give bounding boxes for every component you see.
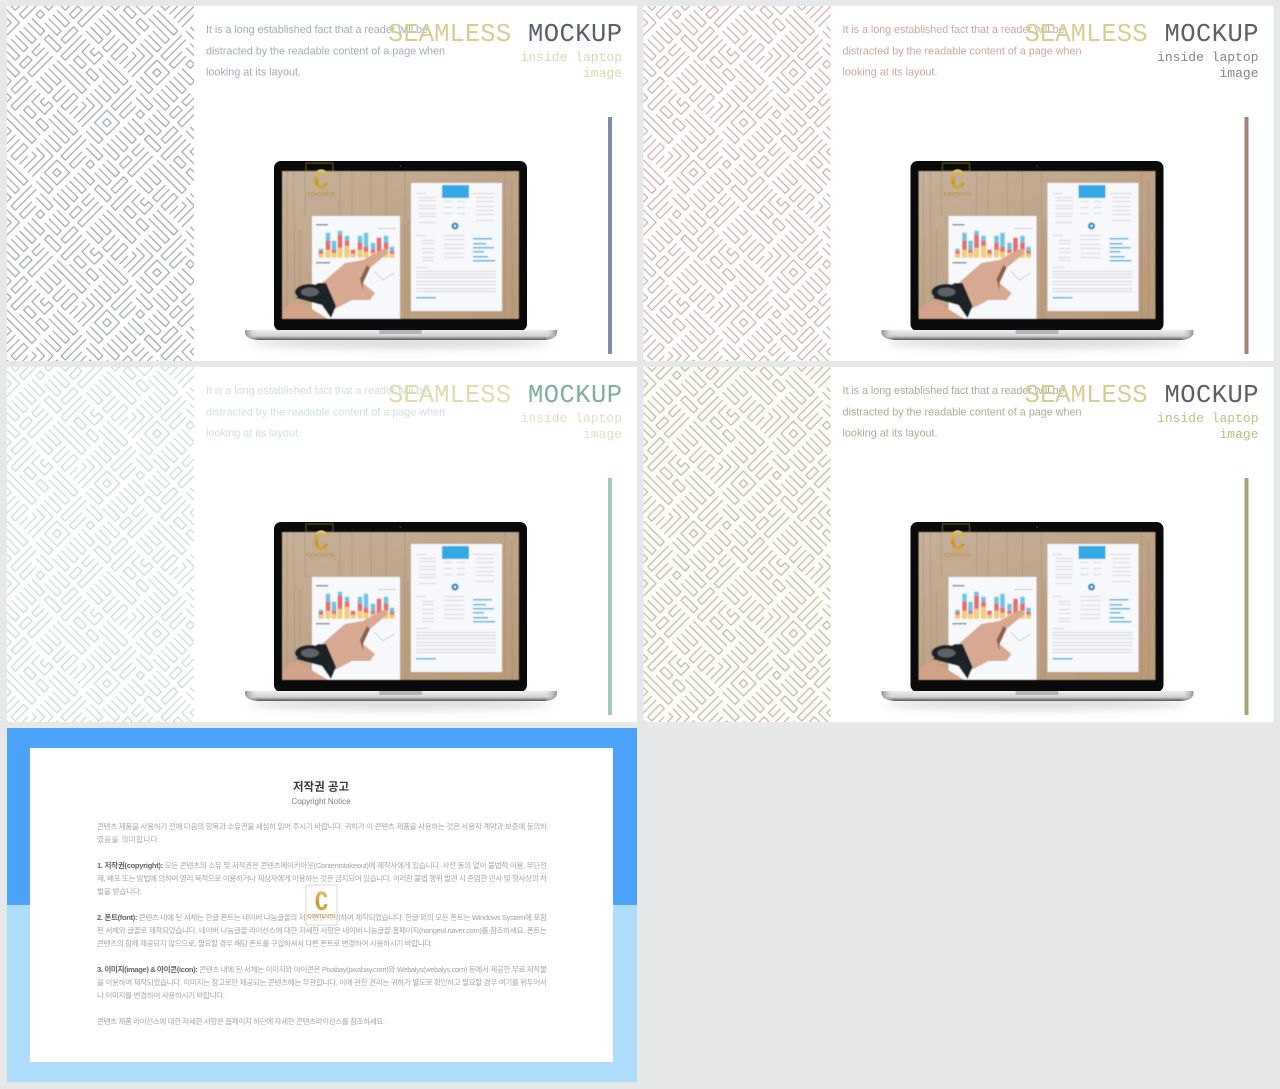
heading: [1024, 20, 1258, 49]
maze pattern panel: [644, 367, 830, 722]
icon: gold logo stamp: C: [315, 887, 328, 919]
subtitle: [1157, 50, 1258, 81]
heading: MOCKUP: [1164, 20, 1258, 49]
text block: image and icon: [97, 964, 547, 1000]
icon: gold logo: [944, 526, 972, 560]
text block: image and icon: 3. 이미지(image) & 아이콘(icon): 콘텐츠 내에 된 서체는 이미지와 아이콘은 Pixabay(pixabay.com)와 Webalys(webalys.com) 등에서 제공한 무료 저작물: [97, 964, 547, 974]
heading: SEAMLESS: [1024, 20, 1148, 49]
subheading: Copyright Notice: [291, 797, 351, 806]
text block: font: 2. 폰트(font): 콘텐츠 내에 된 서체는 한글 폰트는 네이버 나눔글꼴의 저작물을 제외하여 제작되었습니다. 한글 외의 모든 폰트는 Windows System에 포함: [97, 912, 547, 922]
text block: copyright: [97, 860, 547, 896]
maze pattern panel: [7, 6, 194, 361]
subtitle: image: [583, 427, 622, 442]
panel: copyright notice: [7, 728, 637, 1082]
heading: MOCKUP: [528, 20, 622, 49]
accent bar: [1244, 117, 1248, 354]
subtitle: [521, 50, 622, 81]
subtitle: image: [1219, 66, 1258, 81]
accent bar: [608, 478, 612, 715]
icon: gold logo: [307, 165, 335, 199]
text block: [842, 24, 1082, 78]
text block: distracted by the readable content of a page when: [842, 406, 1082, 418]
text block: image and icon: 을 이용하여 제작되었습니다. 이미지는 참고로만 제공되는 콘텐츠에는 무관합니다. 이에 관한 권리는 귀하가 별도로 확인하고 필요할 경우 여기를 위두어서: [97, 977, 547, 987]
subtitle: inside laptop: [521, 411, 622, 426]
text block: It is a long established fact that a reader will be: [206, 24, 428, 36]
heading: copyright title: 저작권 공고: [293, 780, 349, 794]
maze pattern panel: [644, 6, 830, 361]
heading: SEAMLESS: [388, 381, 511, 410]
text block: introduction: 였음을 의미합니다.: [97, 834, 160, 844]
panel: slide 4 olive: [644, 367, 1274, 722]
text block: introduction: 콘텐츠 제품을 사용하기 전에 다음의 항목과 소유권을 세심히 읽어 주시기 바랍니다. 귀하가 이 콘텐츠 제품을 사용하는 것은 사용자 계약과 보증에 동의하: [97, 821, 547, 831]
laptop mockup: [245, 522, 557, 710]
subtitle: image: [583, 66, 622, 81]
icon: gold logo: [307, 526, 335, 560]
subtitle: [1157, 411, 1258, 442]
text block: [206, 385, 445, 440]
subtitle: inside laptop: [521, 50, 622, 65]
subtitle: inside laptop: [1157, 411, 1258, 426]
icon: gold logo stamp: CONTENTS: [308, 914, 336, 920]
text block: looking at its layout.: [842, 66, 938, 78]
text block: [206, 24, 445, 78]
accent bar: [1244, 478, 1248, 715]
text block: distracted by the readable content of a page when: [842, 46, 1082, 58]
text block: introduction: [97, 821, 547, 844]
heading: MOCKUP: [1164, 381, 1258, 410]
text block: It is a long established fact that a reader will be: [842, 385, 1064, 397]
icon: gold logo stamp: [306, 885, 337, 925]
icon: gold logo: [944, 165, 972, 199]
text block: copyright: 재, 배포 또는 방법에 의하여 영리 목적으로 이용하거나 제삼자에게 이용하는 것은 금지되어 있습니다. 이러한 불법 행위 발견 시 준엄한 민사 및 형사상의 처: [97, 873, 547, 883]
laptop mockup: [882, 161, 1194, 349]
laptop mockup: [245, 161, 557, 349]
heading: [388, 20, 622, 49]
subtitle: [521, 411, 622, 442]
heading: SEAMLESS: [388, 20, 511, 49]
text block: It is a long established fact that a reader will be: [206, 385, 428, 397]
subtitle: image: [1219, 427, 1258, 442]
text block: distracted by the readable content of a page when: [206, 406, 445, 418]
text block: copyright: 1. 저작권(copyright): 모든 콘텐츠의 소유 및 저작권은 콘텐츠메이커아웃(Contentstakeout)에 제작사에게 있습니다. 사전 동의 없이 불법적 이용, 무단전: [97, 860, 547, 870]
laptop mockup: [882, 522, 1194, 710]
text block: font: 된 서체와 글꼴로 제작되었습니다. 네이버 나눔글꼴 라이선스에 대한 자세한 사항은 네이버 나눔글꼴 홈페이지(hangeul.naver.com)를 참조하세요. 폰트는: [97, 925, 547, 935]
panel: slide 3 mint: [7, 367, 637, 722]
text block: distracted by the readable content of a page when: [206, 46, 445, 58]
text block: It is a long established fact that a reader will be: [842, 24, 1064, 36]
heading: [1024, 381, 1258, 410]
text block: looking at its layout.: [206, 428, 301, 440]
text block: image and icon: 나 이미지를 변경하여 사용하시기 바랍니다.: [97, 990, 225, 1000]
text block: licence footer: 콘텐츠 제품 라이선스에 대한 자세한 사항은 홈페이지 하단에 자세한 콘텐츠라이선스를 참조하세요.: [97, 1016, 385, 1026]
text block: font: 콘텐츠의 함께 제공되지 않으므로, 필요할 경우 해당 폰트를 구입하셔서 다른 폰트로 변경하여 사용하시기 바랍니다.: [97, 938, 433, 948]
subtitle: inside laptop: [1157, 50, 1258, 65]
accent bar: [608, 117, 612, 354]
panel: slide 1 blue-gray: [7, 6, 637, 361]
text block: copyright: 벌을 받습니다.: [97, 886, 142, 896]
heading: SEAMLESS: [1024, 381, 1148, 410]
maze pattern panel: [7, 367, 194, 722]
text block: looking at its layout.: [206, 66, 301, 78]
heading: [388, 381, 622, 410]
text block: looking at its layout.: [842, 428, 938, 440]
heading: MOCKUP: [528, 381, 622, 410]
panel: slide 2 rose: [644, 6, 1274, 361]
text block: font: [97, 912, 547, 948]
text block: [842, 385, 1082, 440]
